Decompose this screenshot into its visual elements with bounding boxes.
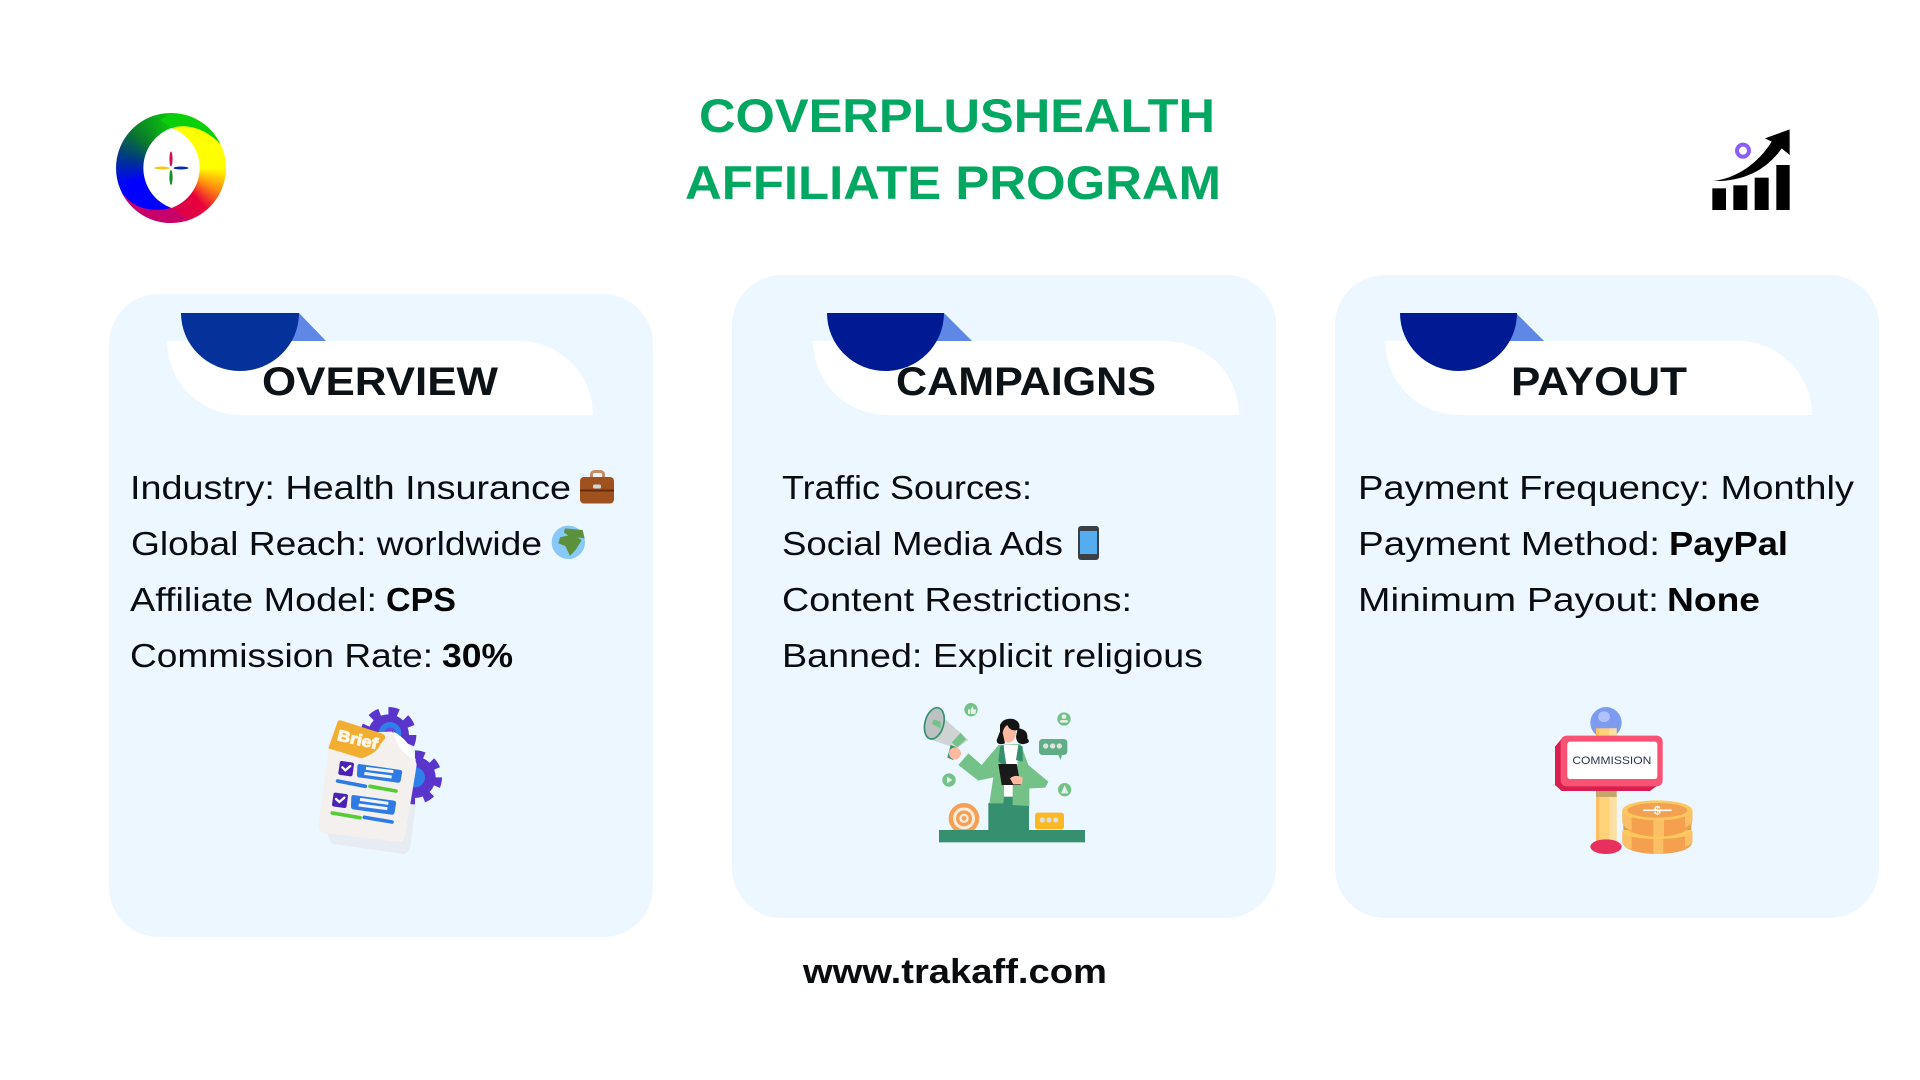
campaigns header blue half circle bbox=[827, 313, 944, 371]
payout header fold triangle bbox=[1487, 313, 1544, 341]
payout facts text: None bbox=[1667, 581, 1760, 618]
overview header fold triangle bbox=[270, 313, 326, 341]
payout header tab bbox=[1385, 341, 1812, 415]
illustration: brief document with gears: Brief bbox=[336, 727, 380, 753]
illustration: commission sign and coins bbox=[1555, 707, 1692, 854]
logo: four petal cross bbox=[154, 152, 188, 185]
campaigns facts text bbox=[782, 469, 1203, 674]
overview facts text: Global Reach: worldwide bbox=[131, 525, 542, 562]
footer website: www.trakaff.com bbox=[802, 953, 1107, 991]
overview facts text: 30% bbox=[442, 637, 513, 674]
logo: colour wheel ring bbox=[116, 113, 226, 223]
overview facts text: CPS bbox=[386, 581, 456, 618]
campaigns facts text: Content Restrictions: bbox=[782, 581, 1132, 618]
logo: white lens centre bbox=[143, 128, 200, 208]
title: COVERPLUSHEALTH bbox=[699, 89, 1215, 142]
title bbox=[685, 89, 1221, 209]
illustration: woman with megaphone bbox=[921, 703, 1085, 842]
panel: payout bbox=[1335, 275, 1879, 918]
overview facts text: Commission Rate: bbox=[130, 637, 433, 674]
illustration: brief document with gears bbox=[318, 711, 438, 854]
icon: growth chart with arrow bbox=[1712, 129, 1790, 210]
logo: magenta bottom sliver bbox=[119, 188, 190, 223]
icon: globe bbox=[552, 526, 585, 559]
icon: mobile phone bbox=[1078, 526, 1099, 560]
payout heading: PAYOUT bbox=[1511, 360, 1687, 404]
payout facts text bbox=[1358, 469, 1855, 618]
campaigns facts text: Traffic Sources: bbox=[782, 469, 1032, 506]
illustration: commission sign and coins: COMMISSION bbox=[1572, 755, 1651, 767]
illustration: commission sign and coins: $ bbox=[1654, 804, 1661, 818]
campaigns header tab bbox=[813, 341, 1239, 415]
payout facts text: Payment Method: bbox=[1358, 525, 1660, 562]
title: AFFILIATE PROGRAM bbox=[685, 156, 1221, 209]
overview facts text: Affiliate Model: bbox=[130, 581, 377, 618]
campaigns header fold triangle bbox=[915, 313, 972, 341]
payout facts text: Minimum Payout: bbox=[1358, 581, 1659, 618]
overview facts text bbox=[130, 469, 571, 674]
icon: briefcase bbox=[580, 472, 614, 504]
overview facts text: Industry: Health Insurance bbox=[130, 469, 571, 506]
overview heading: OVERVIEW bbox=[262, 360, 498, 404]
panel: campaigns bbox=[732, 275, 1276, 918]
campaigns heading: CAMPAIGNS bbox=[896, 360, 1156, 404]
payout facts text: Payment Frequency: Monthly bbox=[1358, 469, 1855, 506]
payout header blue half circle bbox=[1400, 313, 1517, 371]
campaigns facts text: Banned: Explicit religious bbox=[782, 637, 1203, 674]
campaigns facts text: Social Media Ads bbox=[782, 525, 1063, 562]
logo: green top sliver bbox=[160, 113, 222, 146]
payout facts text: PayPal bbox=[1669, 525, 1788, 562]
panel: overview bbox=[109, 294, 653, 937]
overview header blue half circle bbox=[181, 313, 299, 371]
overview header tab bbox=[167, 341, 593, 415]
